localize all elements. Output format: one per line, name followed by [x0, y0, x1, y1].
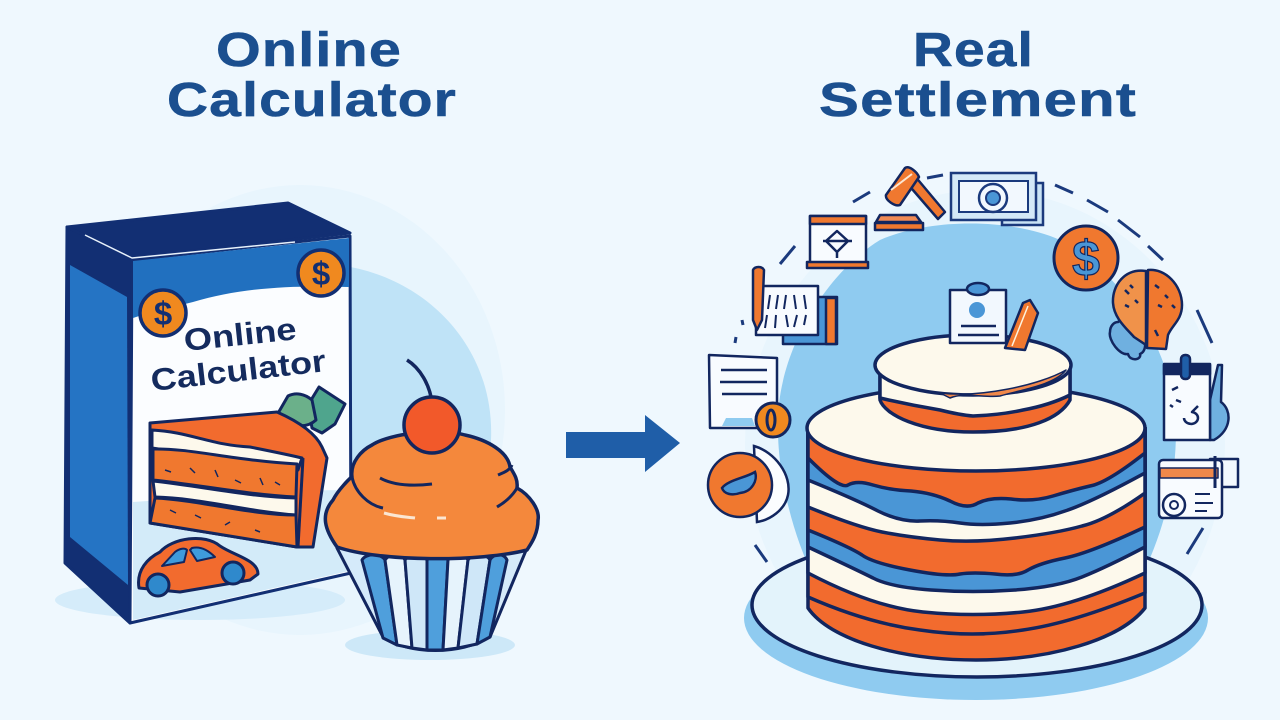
icon: money bills	[951, 173, 1043, 225]
title: online calculator: Calculator	[167, 74, 457, 127]
cupcake	[325, 360, 538, 650]
box left side	[65, 227, 132, 623]
box front lower tint	[133, 490, 349, 620]
lower tier layers	[808, 428, 1145, 660]
box label text: Online	[182, 311, 298, 358]
icon: paper document	[709, 355, 777, 428]
box label text: Calculator	[149, 343, 328, 398]
layered settlement cake	[744, 335, 1208, 700]
title: real settlement	[819, 24, 1137, 127]
cake plate	[744, 533, 1208, 700]
icon: dollar coin left	[140, 290, 186, 336]
icon: dollar circle: $	[1072, 231, 1100, 287]
cupcake cherry	[407, 360, 432, 403]
dashed arc	[735, 175, 1212, 562]
title: real settlement: Settlement	[819, 74, 1137, 127]
title: online calculator	[167, 24, 457, 127]
icon: brain	[1110, 270, 1182, 359]
icon: coin	[756, 403, 790, 437]
cupcake wrapper	[337, 548, 527, 650]
icon: pencil on cake	[1005, 300, 1038, 350]
box top face	[67, 203, 350, 258]
icon: document card on cake	[950, 283, 1006, 343]
icon: clipboard	[1164, 355, 1229, 440]
left background blob	[55, 185, 515, 660]
box left panel	[70, 265, 128, 585]
icon: orange token	[708, 446, 789, 522]
box front blue band	[133, 238, 349, 318]
icon: car	[139, 538, 258, 596]
upper tier	[875, 335, 1071, 432]
right background blob	[745, 190, 1225, 700]
calculator box	[65, 203, 351, 623]
cupcake frosting	[325, 432, 538, 559]
arrow	[566, 415, 680, 472]
title: real settlement: Real	[913, 24, 1034, 77]
icon: dollar coin right	[298, 250, 344, 296]
icon: dollar coin right: $	[312, 255, 330, 292]
icon: presentation board	[807, 216, 868, 268]
icon: calendar report	[1159, 456, 1238, 518]
lower tier top	[807, 385, 1145, 471]
box front face	[130, 236, 351, 623]
icon: gavel	[875, 167, 945, 230]
box label text	[149, 311, 328, 398]
cake slice	[150, 412, 327, 547]
icon: dollar coin left: $	[154, 295, 172, 332]
icon: notepad and pen	[753, 267, 837, 344]
icon: green money	[277, 387, 345, 433]
title: online calculator: Online	[216, 24, 402, 77]
icon: dollar circle	[1054, 226, 1118, 290]
